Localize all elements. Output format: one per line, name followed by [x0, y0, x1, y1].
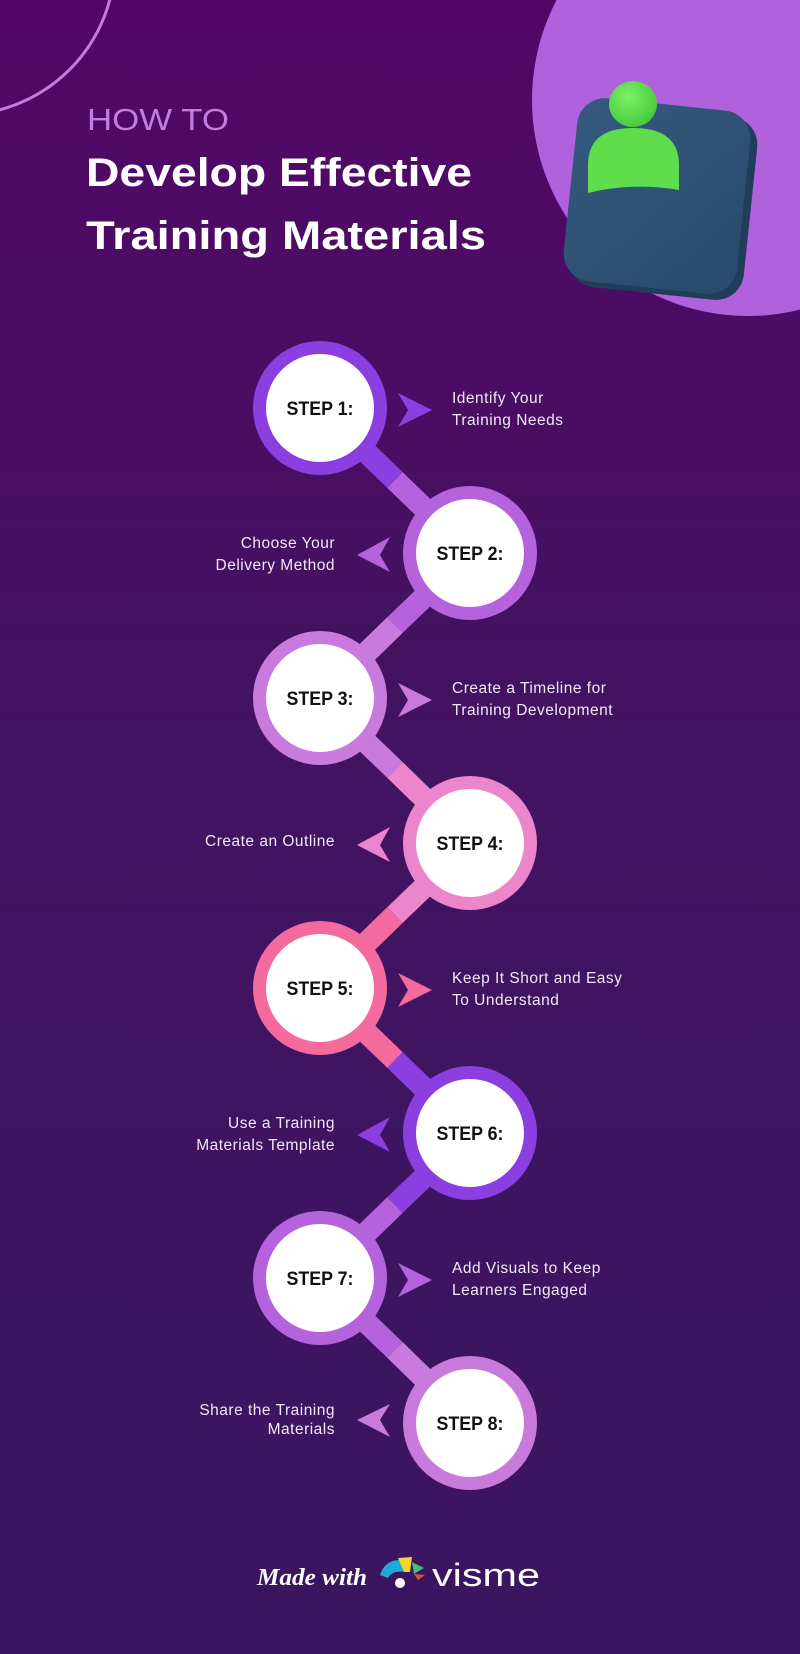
- step 1: Training Needs: [452, 412, 564, 429]
- step 4: Create an Outline: [205, 833, 335, 850]
- step 2: Delivery Method: [216, 557, 335, 574]
- step 5: [253, 921, 622, 1055]
- footer: made with visme: Made with: [256, 1565, 367, 1591]
- step 4: [205, 776, 537, 910]
- step 3: STEP 3:: [286, 689, 354, 710]
- step 7: Learners Engaged: [452, 1282, 588, 1299]
- title: HOW TO: [87, 102, 229, 137]
- step 7: Add Visuals to Keep: [452, 1260, 601, 1277]
- step 7: [253, 1211, 601, 1345]
- step 8: [199, 1356, 537, 1490]
- step 8: STEP 8:: [436, 1414, 504, 1435]
- title: Develop Effective: [86, 151, 472, 195]
- step 4: STEP 4:: [436, 834, 504, 855]
- step 6: [196, 1066, 537, 1200]
- step 5: Keep It Short and Easy: [452, 970, 622, 987]
- footer: made with visme: visme: [432, 1557, 540, 1593]
- step 6: Materials Template: [196, 1137, 335, 1154]
- step 8: Share the Training: [199, 1402, 335, 1419]
- decorative circle top-right: [532, 0, 800, 316]
- step 8: Materials: [268, 1421, 335, 1438]
- icon: user badge: [561, 81, 760, 303]
- footer: made with visme: [256, 1557, 540, 1593]
- step 2: STEP 2:: [436, 544, 504, 565]
- step 5: To Understand: [452, 992, 559, 1009]
- step 1: Identify Your: [452, 390, 544, 407]
- step 3: [253, 631, 613, 765]
- step 2: [216, 486, 537, 620]
- step 1: [253, 341, 564, 475]
- step 2: Choose Your: [241, 535, 335, 552]
- step 3: Create a Timeline for: [452, 680, 606, 697]
- step 5: STEP 5:: [286, 979, 354, 1000]
- step 6: Use a Training: [228, 1115, 335, 1132]
- connectors: [320, 408, 470, 1423]
- step 3: Training Development: [452, 702, 613, 719]
- step 1: STEP 1:: [286, 399, 354, 420]
- title: Training Materials: [86, 214, 486, 258]
- title: [86, 102, 486, 258]
- step 6: STEP 6:: [436, 1124, 504, 1145]
- step 7: STEP 7:: [286, 1269, 354, 1290]
